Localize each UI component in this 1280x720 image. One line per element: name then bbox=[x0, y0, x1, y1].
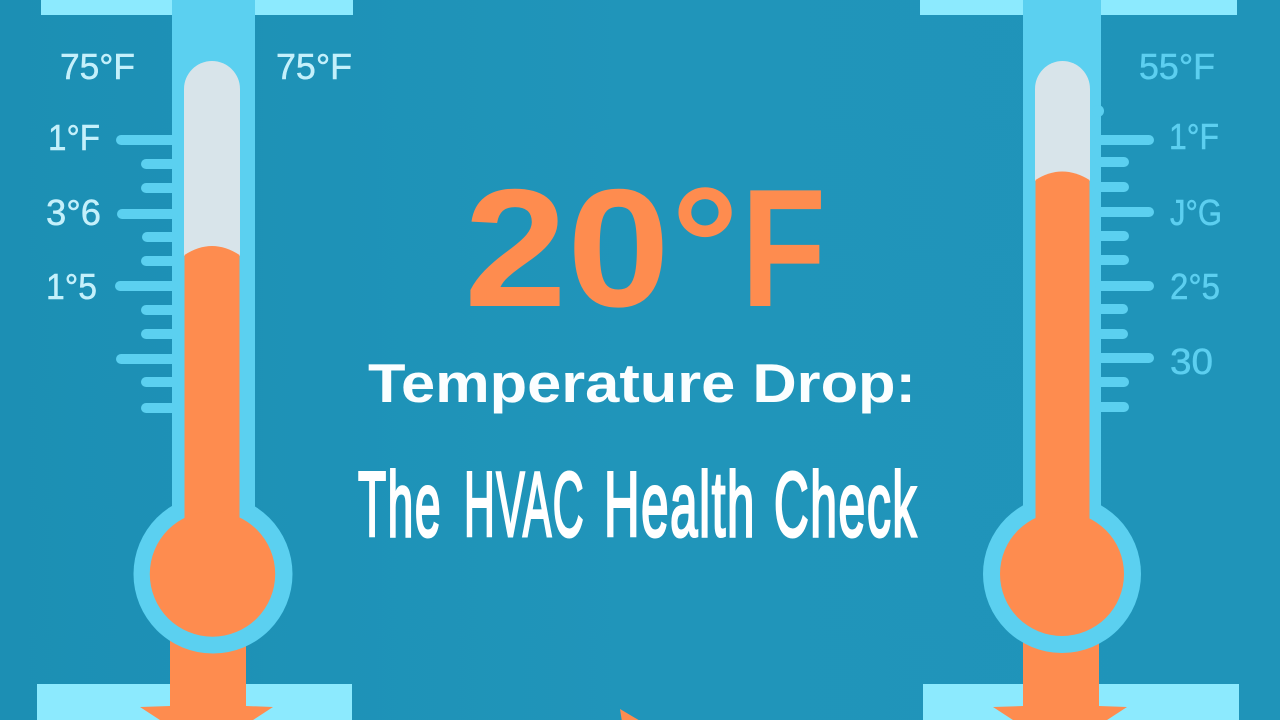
base bracket right bbox=[923, 684, 1239, 720]
big number: 20°F: F bbox=[741, 154, 826, 342]
big number: 20°F: 20 bbox=[464, 154, 670, 342]
scale labels right: 2°5 bbox=[1170, 266, 1220, 307]
mercury left bbox=[184, 246, 240, 530]
scale labels left: 75°F bbox=[60, 46, 135, 87]
big number: 20°F bbox=[464, 154, 826, 342]
ticks right bbox=[1092, 105, 1154, 412]
title: The HVAC Health Check: The bbox=[358, 454, 442, 556]
scale labels left bbox=[46, 46, 352, 307]
scale labels left: 1°F bbox=[48, 117, 100, 158]
scale labels right: 1°F bbox=[1169, 116, 1219, 157]
big number: 20°F: ° bbox=[671, 154, 739, 335]
arrow right bbox=[993, 630, 1127, 720]
heading: Temperature Drop: Temperature Drop: bbox=[368, 352, 916, 414]
title: The HVAC Health Check: HVAC bbox=[464, 454, 585, 556]
empty column left bbox=[184, 61, 240, 256]
scale labels right: 55°F bbox=[1139, 46, 1215, 87]
scale labels right: J°G bbox=[1170, 192, 1222, 233]
scale labels left: 1°5 bbox=[46, 266, 97, 307]
arrow tip, bottom centre bbox=[620, 709, 642, 720]
scale labels left: 75°F bbox=[276, 46, 352, 87]
mercury bulb right bbox=[1000, 512, 1124, 636]
top bracket right bbox=[920, 0, 1237, 15]
title: The HVAC Health Check: Health bbox=[604, 454, 756, 556]
left thermometer bbox=[37, 0, 353, 720]
mercury right bbox=[1036, 172, 1090, 530]
title: The HVAC Health Check: Check bbox=[774, 454, 918, 556]
scale labels right bbox=[1139, 46, 1222, 382]
tube right bbox=[1023, 0, 1101, 540]
empty column right bbox=[1035, 61, 1090, 181]
title: The HVAC Health Check bbox=[358, 454, 918, 556]
scale labels left: 3°6 bbox=[46, 192, 101, 233]
base bracket left bbox=[37, 684, 352, 720]
tube left bbox=[172, 0, 255, 540]
ticks left bbox=[115, 135, 178, 413]
right thermometer bbox=[920, 0, 1239, 720]
mercury bulb left bbox=[150, 511, 275, 637]
bulb left bbox=[134, 494, 292, 654]
arrow left bbox=[140, 630, 273, 720]
scale labels right: 30 bbox=[1170, 341, 1213, 382]
bulb right bbox=[983, 495, 1141, 653]
top bracket left bbox=[41, 0, 353, 15]
